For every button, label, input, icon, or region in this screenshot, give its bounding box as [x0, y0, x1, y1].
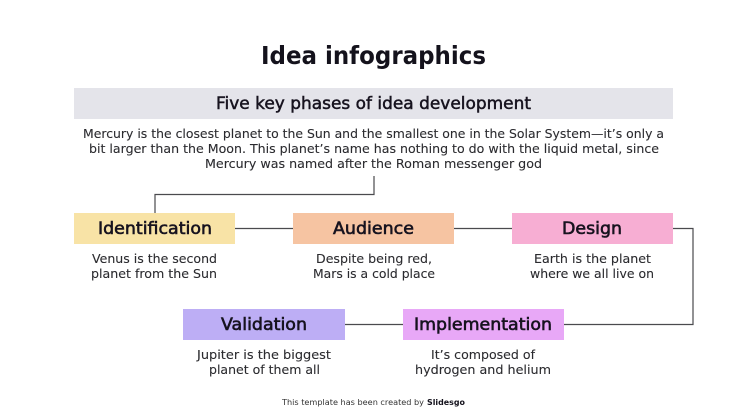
footer credit: Slidesgo	[427, 398, 465, 407]
intro text block	[83, 126, 664, 171]
phase: Identification	[74, 213, 235, 281]
phase: Audience: Mars is a cold place	[313, 266, 435, 281]
phase: Identification: Venus is the second	[92, 251, 217, 266]
phase: Implementation: hydrogen and helium	[415, 362, 551, 377]
phase: Implementation	[403, 309, 564, 377]
phase: Design: Earth is the planet	[534, 251, 651, 266]
connector: Implementation to Validation	[345, 324, 403, 326]
intro text block: bit larger than the Moon. This planet’s name has nothing to do with the liquid metal, since	[89, 141, 659, 156]
phase: Identification: planet from the Sun	[91, 266, 217, 281]
phase: Design	[512, 213, 673, 281]
subtitle banner	[74, 88, 673, 119]
intro text block: Mercury is the closest planet to the Sun and the smallest one in the Solar System—it’s only a	[83, 126, 664, 141]
phase: Validation: planet of them all	[209, 362, 320, 377]
subtitle banner: Five key phases of idea development	[216, 94, 531, 114]
intro text block: Mercury was named after the Roman messenger god	[205, 156, 542, 171]
phase: Audience: Despite being red,	[316, 251, 432, 266]
phase: Implementation: Implementation	[414, 315, 552, 334]
arrow: intro to Identification	[155, 176, 374, 213]
phase: Design: where we all live on	[530, 266, 654, 281]
phase: Design: Design	[562, 219, 622, 238]
phase: Validation	[183, 309, 345, 377]
phase: Implementation: It’s composed of	[431, 347, 536, 362]
footer credit: This template has been created by	[281, 398, 424, 407]
phase: Validation: Jupiter is the biggest	[196, 347, 331, 362]
title: Idea infographics	[261, 41, 486, 70]
connector: Audience to Design	[454, 228, 512, 230]
phase: Identification: Identification	[98, 219, 212, 238]
connector: Design to Implementation	[564, 228, 693, 324]
connector: Identification to Audience	[235, 228, 293, 230]
phase: Audience: Audience	[333, 219, 414, 238]
phase: Audience	[293, 213, 454, 281]
phase: Validation: Validation	[221, 315, 307, 334]
